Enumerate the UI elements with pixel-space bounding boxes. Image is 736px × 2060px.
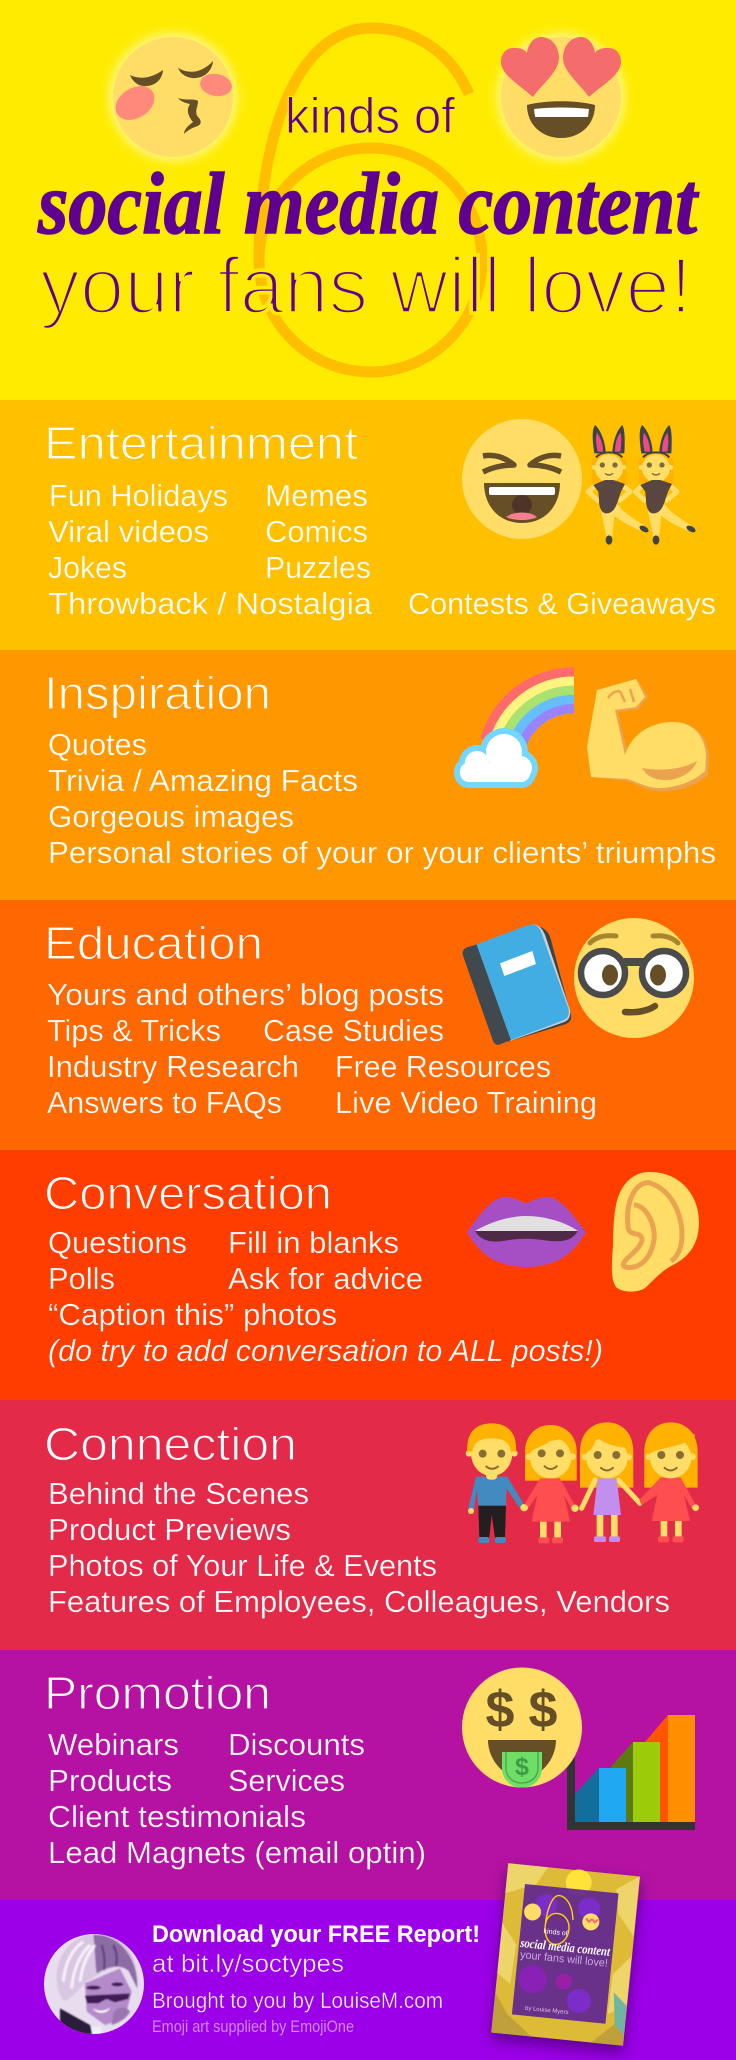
list: inspiration items: Personal stories of your or your clients’ triumphs [48,835,716,870]
panel: footer [0,1862,736,2060]
image: report cover: social media content [519,1935,611,1959]
icon: kissing face [109,33,237,161]
list: conversation items: (do try to add conversation to ALL posts!) [48,1333,603,1368]
list: inspiration items: Quotes [48,727,147,762]
icon: nerd face [574,918,694,1038]
list: entertainment items: Contests & Giveaways [408,586,716,621]
list: conversation items: Ask for advice [228,1261,423,1296]
panel: promotion [0,1650,736,1900]
list: conversation items [48,1225,603,1368]
list: promotion items: Services [228,1763,345,1798]
list: conversation items: “Caption this” photos [48,1297,337,1332]
panel: conversation [0,1150,736,1400]
panel: inspiration [0,650,736,900]
heading: promotion: Promotion [44,1667,271,1719]
list: entertainment items: Jokes [48,550,127,585]
list: education items: Answers to FAQs [47,1085,282,1120]
panel: education [0,900,736,1150]
image: report cover: by Louise Myers [525,2006,569,2016]
list: promotion items: Products [48,1763,172,1798]
list: conversation items: Polls [48,1261,115,1296]
icon: money mouth face: $ [515,1753,529,1781]
list: promotion items: Discounts [228,1727,365,1762]
list: connection items: Behind the Scenes [48,1476,309,1511]
image: report cover: kinds of [543,1928,568,1938]
list: connection items [48,1476,670,1619]
panel: title header [0,0,736,400]
icon: bunny dancers [588,425,697,545]
icon: lips [467,1197,586,1267]
list: education items: Yours and others’ blog posts [47,977,444,1012]
icon: heart eyes face [497,33,625,161]
list: entertainment items: Comics [265,514,368,549]
list: conversation items: Fill in blanks [228,1225,399,1260]
icon: rising bar chart [567,1715,695,1830]
panel: entertainment [0,400,736,650]
list: connection items: Photos of Your Life & Events [48,1548,437,1583]
icon: rainbow and cloud [454,672,574,788]
list: promotion items [48,1727,426,1870]
list: education items: Case Studies [263,1013,444,1048]
title line: kinds of: kinds of [285,88,455,144]
list: promotion items: Client testimonials [48,1799,306,1834]
icon: money mouth face: $ [486,1681,515,1739]
list: entertainment items [48,478,716,621]
image: report cover [490,1862,642,2054]
icon: blue book [463,924,571,1045]
callout: download report: Download your FREE Report! [152,1921,480,1948]
list: inspiration items: Gorgeous images [48,799,294,834]
list: connection items: Features of Employees, Colleagues, Vendors [48,1584,670,1619]
list: education items [47,977,597,1120]
icon: money mouth face: $ [529,1681,558,1739]
list: education items: Tips & Tricks [47,1013,221,1048]
list: entertainment items: Viral videos [48,514,209,549]
heading: inspiration: Inspiration [44,667,271,719]
heading: connection: Connection [44,1418,297,1470]
list: entertainment items: Fun Holidays [49,478,228,513]
list: entertainment items: Puzzles [265,550,371,585]
icon: group of people holding hands [466,1422,699,1543]
icon: money mouth face [462,1668,582,1788]
icon: laughing face [462,419,582,539]
list: inspiration items: Trivia / Amazing Facts [48,763,358,798]
icon: ear [612,1172,699,1292]
panel: connection [0,1400,736,1650]
icon: flexed biceps [587,679,709,791]
list: entertainment items: Throwback / Nostalgia [48,586,373,621]
list: conversation items: Questions [48,1225,187,1260]
list: promotion items: Webinars [48,1727,179,1762]
photo: author portrait [44,1933,144,2038]
list: education items: Live Video Training [335,1085,597,1120]
list: inspiration items [48,727,716,870]
heading: education: Education [44,917,263,969]
text: credit: Brought to you by LouiseM.com [152,1988,443,2013]
text: report link: at bit.ly/soctypes [152,1950,344,1978]
image: report cover: your fans will love! [520,1949,608,1970]
text: emoji credit: Emoji art supplied by EmojiOne [152,2018,354,2036]
list: connection items: Product Previews [48,1512,291,1547]
big number 6 [259,28,482,372]
list: entertainment items: Memes [265,478,368,513]
title line: your fans will love: your fans will love! [40,241,692,330]
list: education items: Industry Research [47,1049,299,1084]
heading: entertainment: Entertainment [44,417,358,469]
heading: conversation: Conversation [44,1167,332,1219]
list: education items: Free Resources [335,1049,551,1084]
list: promotion items: Lead Magnets (email optin) [48,1835,426,1870]
